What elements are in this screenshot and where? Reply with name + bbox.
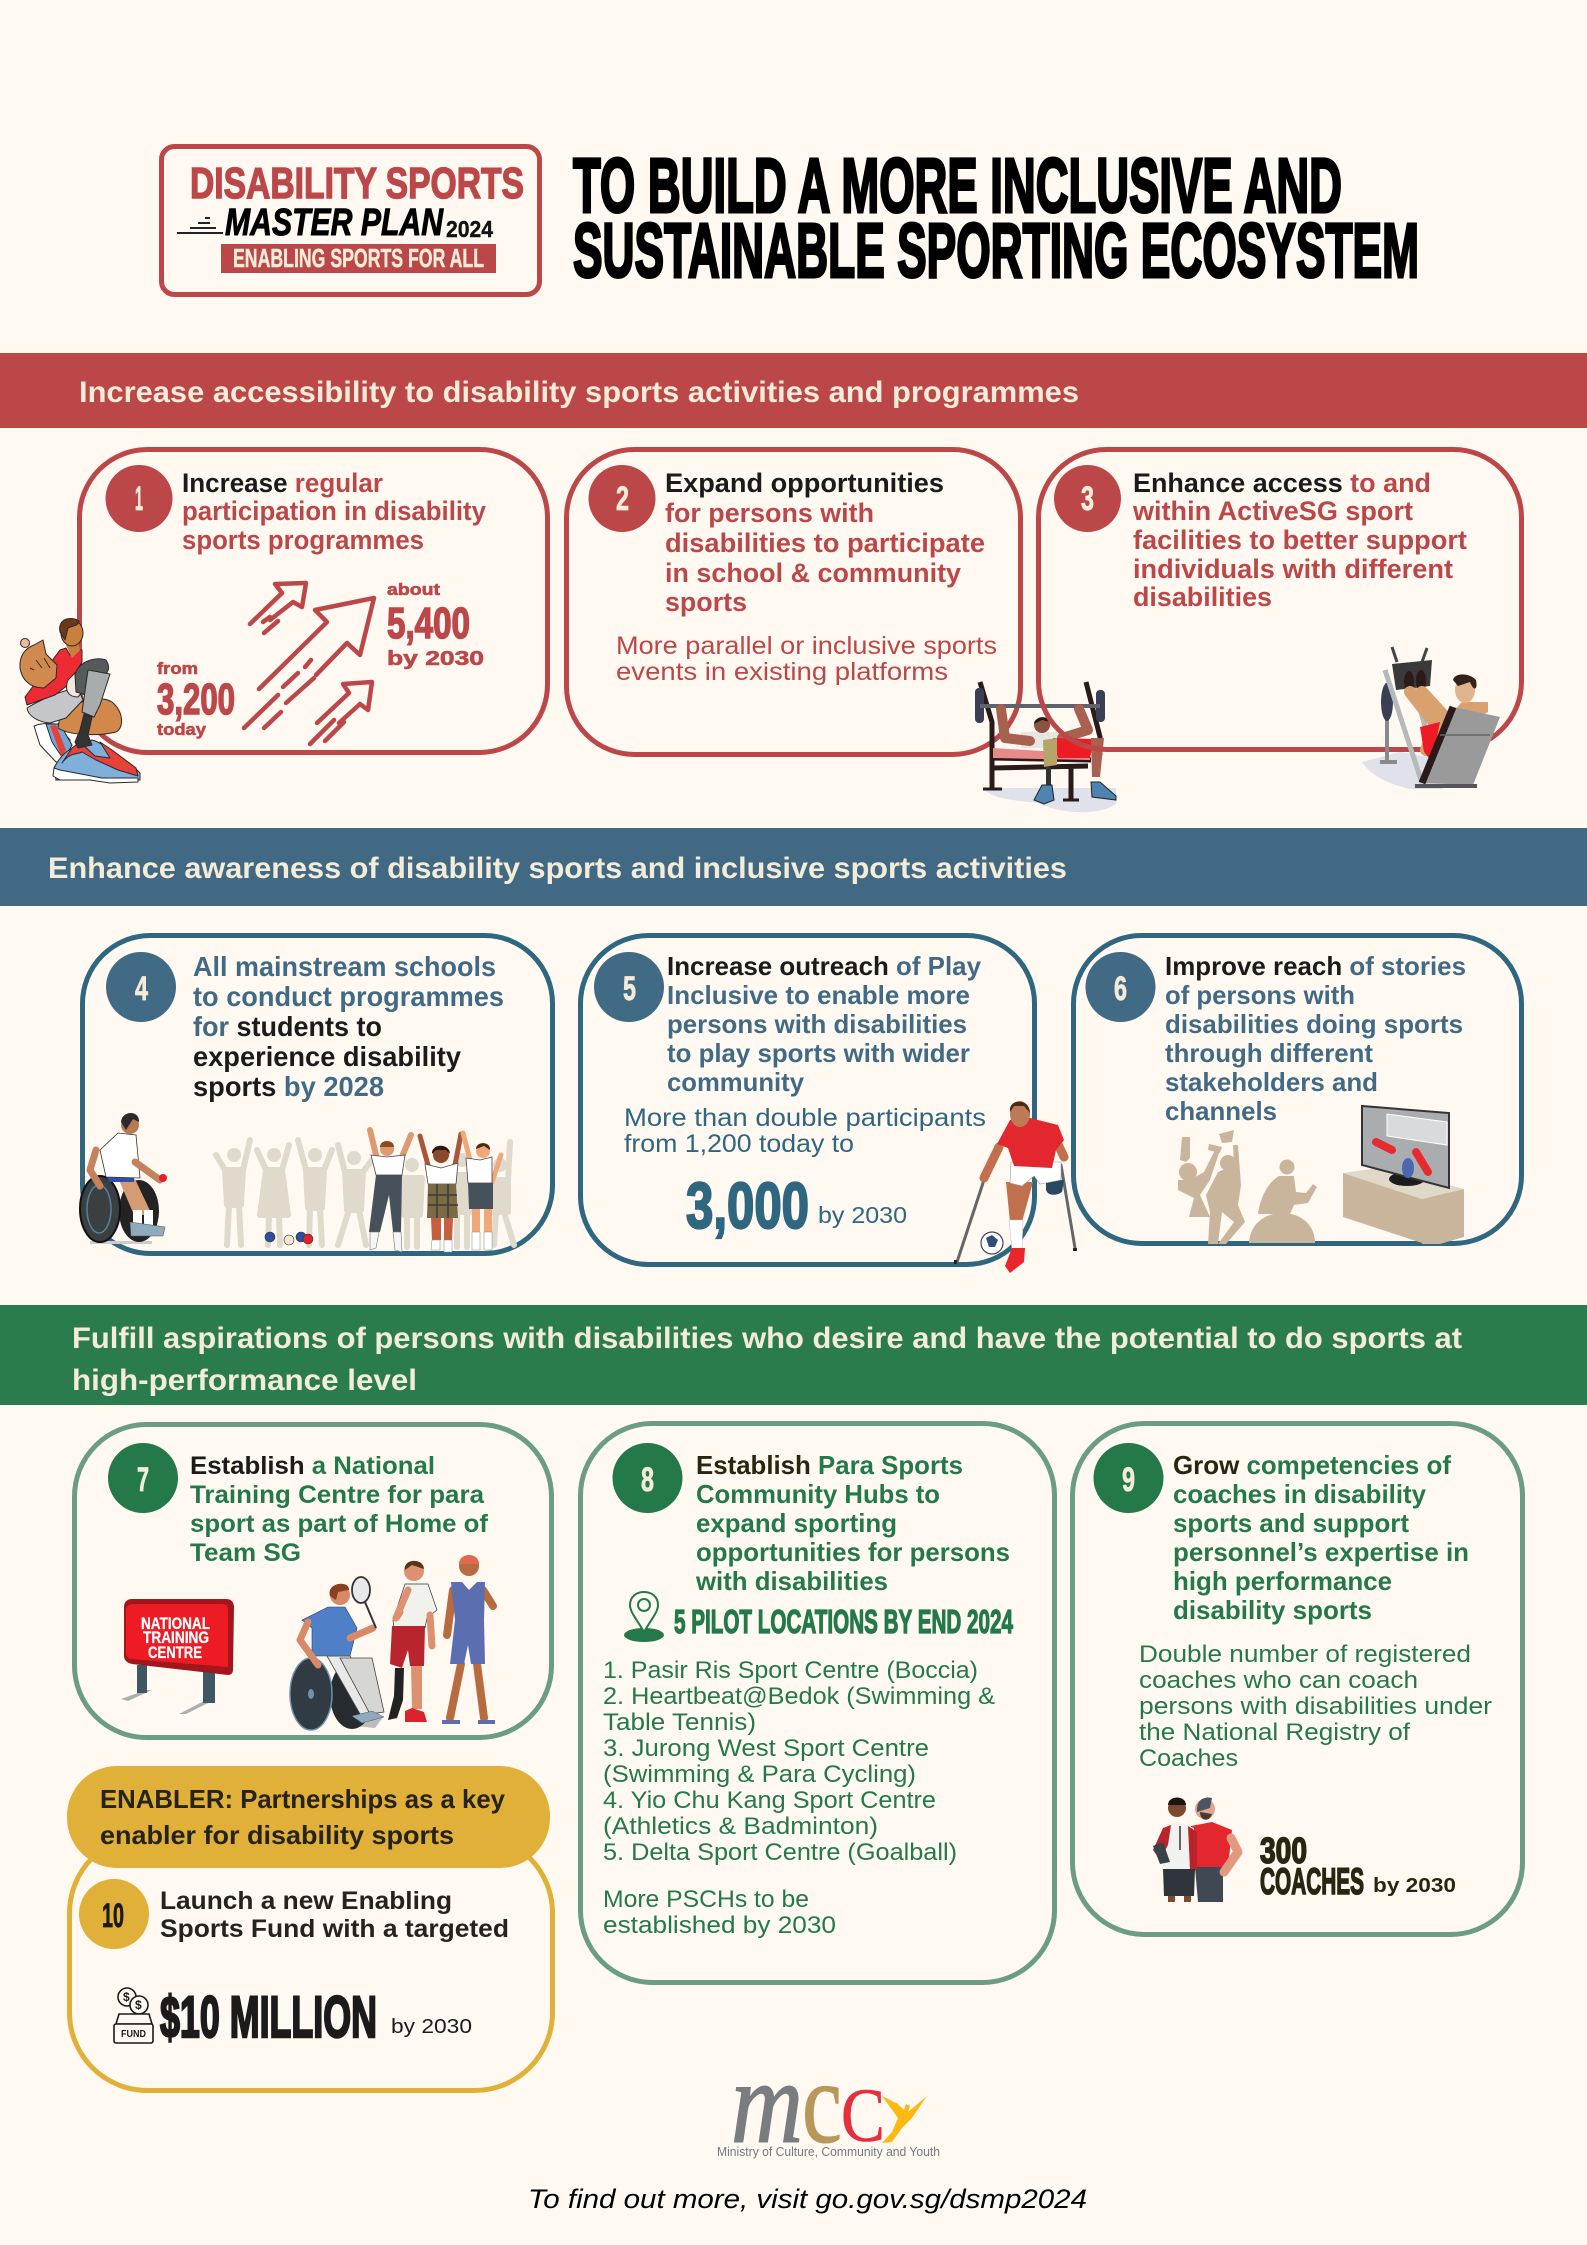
badge 2 [588,465,656,532]
card 2 heading [665,468,985,617]
panel: card 3 ActiveSG access [1038,450,1522,789]
card 9 note: the National Registry of [1139,1719,1410,1746]
badge 1: 1 [135,480,143,518]
card 6 heading: stakeholders and [1165,1067,1378,1097]
card 5 heading: Inclusive to enable more [667,980,970,1010]
card 5 note [624,1104,986,1158]
card 2 note: events in existing platforms [616,658,948,686]
card 1 heading: participation in disability [182,496,486,526]
section band: awareness: Enhance awareness of disability sports and inclusive sports activities [48,852,1067,885]
card 2 heading: sports [665,587,747,617]
enabler pill [67,1766,550,1868]
section band: accessibility: Increase accessibility to disability sports activities and programmes [79,376,1079,409]
badge 3 [1054,465,1121,532]
title [573,143,1419,294]
badge 8 [612,1443,682,1513]
card 4 heading [193,951,504,1102]
card 9 heading [1173,1450,1469,1625]
illustration: boccia balls [265,1232,313,1245]
card 9 heading: personnel’s expertise in [1173,1537,1469,1567]
icon: fund box with coins: $ [135,1998,142,2012]
stat: 3,000 by 2030: by 2030 [818,1202,907,1228]
illustration: National Training Centre sign [121,1599,234,1714]
logo: MCCY [717,2037,940,2168]
list: pilot locations: (Athletics & Badminton) [603,1813,878,1840]
icon: fund box with coins: FUND [121,2029,146,2040]
card 6 heading: disabilities doing sports [1165,1009,1463,1039]
card 5 note: from 1,200 today to [624,1130,854,1158]
card 6 heading: through different [1165,1038,1373,1068]
badge 7 [108,1443,178,1513]
stat: about 5,400 by 2030: by 2030 [387,648,484,670]
icon: fund box with coins: $ [123,1990,130,2004]
panel: card 10 Enabling Sports Fund [67,1766,552,2090]
card 1 heading [182,468,486,555]
stat: from 3,200 today [157,659,235,739]
card 5 heading: Increase outreach of Play [667,951,982,981]
card 10 heading: Sports Fund with a targeted [160,1915,509,1943]
card 2 heading: disabilities to participate [665,528,985,558]
chart: rising arrows [244,583,374,744]
panel: card 9 coaches [1072,1424,1522,1934]
card 7 heading: Training Centre for para [190,1481,485,1509]
card 7 heading [190,1452,489,1567]
section band: aspirations: Fulfill aspirations of persons with disabilities who desire and have the potential to do sports at [72,1322,1462,1355]
illustration: students cheering [369,1130,501,1252]
list: pilot locations: (Swimming & Para Cycling) [603,1761,916,1788]
panel: card 7 National Training Centre [74,1424,552,1738]
enabler pill: ENABLER: Partnerships as a key [100,1784,506,1814]
card 8 heading: Community Hubs to [696,1479,940,1509]
card 3 heading: disabilities [1133,582,1272,612]
card 8 note: established by 2030 [603,1912,836,1939]
panel: card 5 Play Inclusive outreach [580,936,1075,1273]
illustration: television on stand [1343,1106,1464,1244]
logo: MCCY: C [841,2074,885,2158]
stat: about 5,400 by 2030: about [387,580,440,599]
stat: 3,000 by 2030: 3,000 [686,1169,809,1242]
card 9 heading: disability sports [1173,1595,1372,1625]
card 9 heading: sports and support [1173,1508,1409,1538]
card 8 heading: opportunities for persons [696,1537,1010,1567]
card 8 note: More PSCHs to be [603,1886,809,1913]
stat: $10 million by 2030: by 2030 [391,2016,472,2038]
icon: fund box with coins [114,1988,153,2043]
stat: from 3,200 today: 3,200 [157,675,235,724]
logo: Disability Sports Master Plan 2024: 2024 [446,216,493,242]
badge 10 [79,1879,149,1949]
badge 2: 2 [616,480,629,518]
logo: Disability Sports Master Plan 2024: MASTER PLAN [225,202,444,244]
panel: card 6 stories [1074,936,1522,1244]
illustration: National Training Centre sign: TRAINING [143,1628,209,1647]
panel: card 4 mainstream schools [80,936,552,1254]
card 3 heading: facilities to better support [1133,525,1467,555]
illustration: National Training Centre sign: CENTRE [148,1643,202,1662]
card 9 note: Coaches [1139,1745,1238,1772]
list: pilot locations: 2. Heartbeat@Bedok (Swimming & [603,1683,995,1710]
card 5 note: More than double participants [624,1104,986,1132]
card 2 heading: in school & community [665,558,961,588]
card 4 heading: sports by 2028 [193,1071,384,1102]
logo: Disability Sports Master Plan 2024 [162,146,540,294]
logo: MCCY: m [731,2037,803,2168]
card 9 heading: coaches in disability [1173,1479,1427,1509]
card 2 note [616,632,997,686]
panel: card 1 regular participation [20,450,547,783]
list: pilot locations: 4. Yio Chu Kang Sport Centre [603,1787,936,1814]
section band: accessibility [0,353,1587,428]
stat: about 5,400 by 2030 [387,580,484,670]
card 1 heading: Increase regular [182,468,383,498]
panel: card 8 Para Sports Community Hubs [580,1424,1054,1982]
card 6 heading: of persons with [1165,980,1355,1010]
enabler pill: enabler for disability sports [100,1820,454,1850]
card 8 note [603,1886,836,1939]
list: pilot locations: 3. Jurong West Sport Centre [603,1735,929,1762]
card 2 note: More parallel or inclusive sports [616,632,997,660]
card 8 heading: expand sporting [696,1508,897,1538]
list: pilot locations: 1. Pasir Ris Sport Centre (Boccia) [603,1657,978,1684]
card 7 heading: Establish a National [190,1452,435,1480]
illustration: fan silhouettes [1178,1130,1317,1244]
card 9 note: coaches who can coach [1139,1667,1418,1694]
badge 5 [594,952,664,1022]
logo: Disability Sports Master Plan 2024: ENABLING SPORTS FOR ALL [233,243,484,273]
card 6 heading: channels [1165,1096,1277,1126]
card 3 heading [1132,468,1467,612]
card 4 heading: to conduct programmes [193,981,504,1012]
card 8 heading [695,1450,1010,1596]
stat: from 3,200 today: today [157,720,207,739]
card 5 heading: persons with disabilities [667,1009,967,1039]
card 4 heading: All mainstream schools [193,951,496,982]
badge 8: 8 [641,1461,654,1499]
badge 9 [1094,1443,1164,1513]
badge 5: 5 [623,970,636,1008]
logo: Disability Sports Master Plan 2024: DISABILITY SPORTS [190,159,524,208]
badge 4: 4 [135,970,148,1008]
card 1 heading: sports programmes [182,525,424,555]
illustration: para athletes trio [290,1555,495,1730]
badge 10: 10 [102,1897,124,1935]
badge 6 [1086,952,1156,1022]
card 9 note: persons with disabilities under [1139,1693,1492,1720]
illustration: leg press athlete [1362,647,1500,789]
card 9 note: Double number of registered [1139,1641,1471,1668]
icon: location pin [624,1592,664,1642]
card 8 heading: Establish Para Sports [696,1450,963,1480]
badge 1 [106,465,172,532]
list: pilot locations [603,1657,995,1866]
card 6 heading: Improve reach of stories [1165,951,1466,981]
card 10 heading [160,1887,509,1943]
section band: aspirations: high-performance level [72,1364,417,1397]
card 6 heading [1165,951,1466,1126]
card 3 heading: within ActiveSG sport [1132,496,1413,526]
card 10 heading: Launch a new Enabling [160,1887,452,1915]
badge 7: 7 [137,1461,149,1499]
illustration: wheelchair boccia player [80,1113,167,1244]
card 9 note [1139,1641,1492,1772]
illustration: National Training Centre sign: NATIONAL [141,1614,210,1633]
callout: pilot locations: 5 PILOT LOCATIONS BY END 2024 [674,1603,1013,1640]
stat: 300 coaches by 2030 [1260,1830,1456,1902]
panel: card 2 opportunities [566,450,1116,812]
logo: MCCY: c [802,2037,842,2168]
card 5 heading: community [667,1067,805,1097]
illustration: squatting athlete [20,619,140,783]
illustration: bench press athlete [975,682,1116,812]
card 3 heading: Enhance access to and [1133,468,1431,498]
card 2 heading: for persons with [665,498,874,528]
section band: aspirations [0,1305,1587,1405]
card 9 heading: high performance [1173,1566,1392,1596]
badge 9: 9 [1122,1461,1135,1499]
badge 4 [106,952,176,1022]
section band: awareness [0,828,1587,906]
card 4 heading: for students to [193,1011,382,1042]
stat: from 3,200 today: from [157,659,198,678]
badge 3: 3 [1081,480,1094,518]
card 3 heading: individuals with different [1133,554,1453,584]
card 7 heading: Team SG [190,1539,301,1567]
logo: MCCY: Ministry of Culture, Community and Youth [717,2145,940,2159]
card 5 heading [667,951,982,1097]
illustration: crowd silhouettes [216,1140,514,1247]
footer link text: To find out more, visit go.gov.sg/dsmp2024 [528,2184,1087,2214]
card 4 heading: experience disability [193,1041,461,1072]
card 8 heading: with disabilities [695,1566,888,1596]
stat: $10 million by 2030: $10 MILLION [160,1985,377,2050]
card 2 heading: Expand opportunities [665,468,944,498]
badge 6: 6 [1114,970,1127,1008]
stat: 300 coaches by 2030: by 2030 [1373,1875,1456,1897]
stat: about 5,400 by 2030: 5,400 [387,599,470,648]
stat: 300 coaches by 2030: 300 [1260,1830,1307,1871]
card 9 heading: Grow competencies of [1173,1450,1451,1480]
card 7 heading: sport as part of Home of [190,1510,489,1538]
card 5 heading: to play sports with wider [667,1038,970,1068]
illustration: two coaches [1153,1798,1238,1902]
stat: 300 coaches by 2030: COACHES [1260,1861,1364,1902]
list: pilot locations: Table Tennis) [603,1709,756,1736]
illustration: amputee footballer [954,1101,1075,1273]
list: pilot locations: 5. Delta Sport Centre (Goalball) [603,1839,957,1866]
